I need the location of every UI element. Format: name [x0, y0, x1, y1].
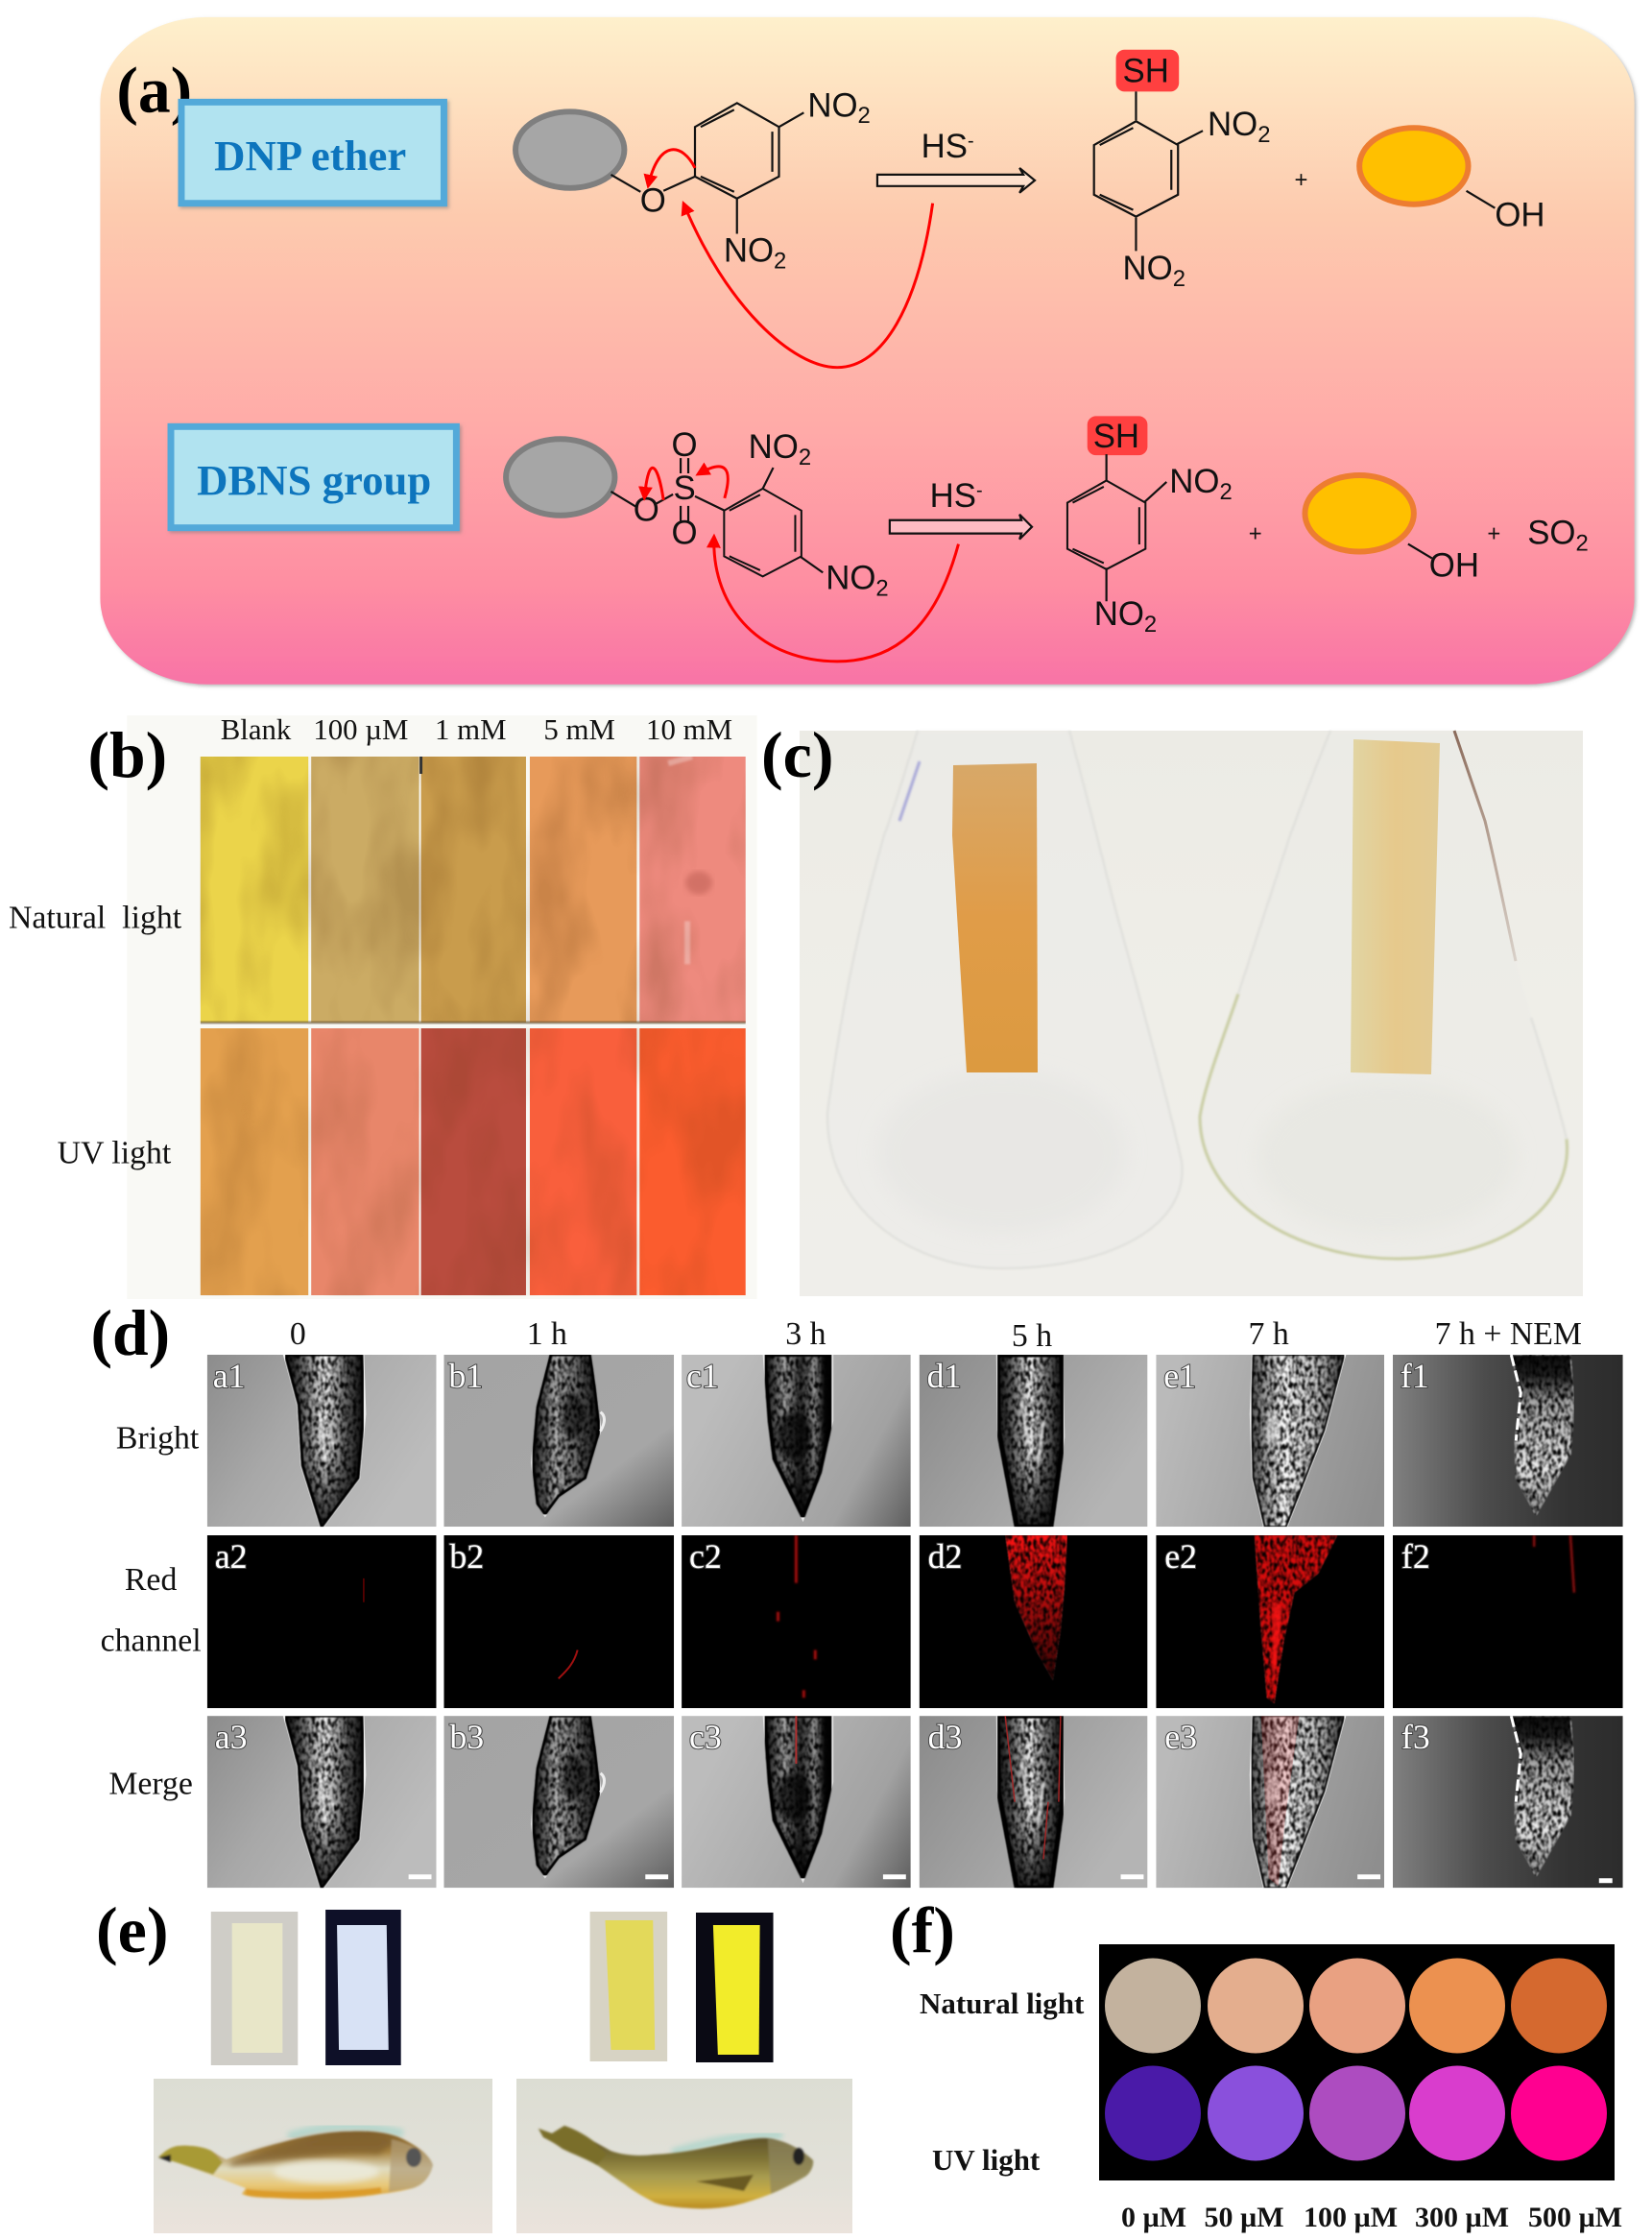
image e2: e2 [1164, 1537, 1197, 1576]
row label: UV light: UV light [932, 2143, 1041, 2177]
concentration labels: 300 µM [1415, 2202, 1509, 2233]
plus sign: + [1487, 521, 1500, 547]
column headers: 5 h [1012, 1318, 1052, 1354]
product: 2,4-dinitrothiophenol [1094, 50, 1271, 292]
product: 2,4-dinitrothiophenol: NO [1169, 464, 1219, 500]
product: fluorophore [1305, 475, 1479, 584]
panel a background [100, 17, 1635, 685]
molecule: DNP ether substrate: O [640, 183, 666, 220]
column headers: 3 h [785, 1316, 826, 1352]
flask photo background [800, 731, 1583, 1296]
heading (d): (d) [90, 1297, 170, 1369]
black panel with discs [1099, 1944, 1615, 2180]
reagent HS-: HS [922, 129, 968, 165]
image c2: c2 [689, 1537, 722, 1576]
row label: Natural light: Natural light [9, 900, 182, 935]
column headers: 1 h [527, 1316, 567, 1352]
image a2: a2 [215, 1537, 248, 1576]
concentration labels: 50 µM [1204, 2202, 1284, 2233]
panel d: confocal imaging of root tips [90, 1297, 1623, 1888]
discs: UV light [1105, 2066, 1607, 2160]
row labels [101, 1420, 202, 1802]
molecule: DBNS substrate: O [672, 427, 698, 464]
molecule: DNP ether substrate: NO [724, 232, 774, 269]
product: 2,4-dinitrothiophenol: NO [1094, 596, 1144, 633]
image b1: b1 [448, 1357, 483, 1395]
product: SO2: SO [1527, 516, 1575, 552]
image d1 [920, 1355, 1148, 1527]
product: 2,4-dinitrothiophenol: 2 [1144, 612, 1157, 638]
photo: spoiled fish [516, 2079, 852, 2233]
panel c: strips in conical flasks [761, 718, 1583, 1296]
product: 2,4-dinitrothiophenol [1067, 416, 1233, 638]
product: 2,4-dinitrothiophenol: 2 [1257, 122, 1271, 148]
concentration labels [1121, 2202, 1622, 2233]
heading (a): (a) [116, 54, 192, 126]
image f1: f1 [1401, 1357, 1429, 1395]
panel f: concentration discs [890, 1893, 1622, 2233]
image a3: a3 [215, 1718, 248, 1756]
image b1 [443, 1355, 674, 1527]
image c2 [682, 1535, 911, 1709]
molecule: DBNS substrate: NO [826, 560, 875, 596]
image d3 [920, 1716, 1148, 1888]
product: 2,4-dinitrothiophenol: 2 [1173, 266, 1185, 292]
image f1 [1393, 1355, 1623, 1527]
label box: DBNS group [171, 426, 456, 528]
image f3: f3 [1401, 1718, 1430, 1756]
strip: fresh, natural light [211, 1912, 298, 2065]
image f2 [1393, 1535, 1623, 1709]
right strip [1351, 739, 1440, 1074]
molecule: DBNS substrate: O [634, 493, 659, 529]
image f2: f2 [1401, 1537, 1430, 1576]
panel b: test strips under natural and UV light [9, 713, 757, 1299]
image a1 [207, 1355, 436, 1527]
arrow: red electron curves 2 [644, 467, 958, 662]
reagent HS-: - [976, 480, 983, 501]
row label: UV light: UV light [58, 1135, 172, 1171]
molecule: DBNS substrate: 2 [875, 575, 889, 601]
molecule: DNP ether substrate: 2 [858, 103, 871, 129]
product: 2,4-dinitrothiophenol: NO [1123, 251, 1173, 287]
product: fluorophore: OH [1429, 547, 1479, 584]
molecule: DBNS substrate: NO [749, 429, 799, 466]
row labels: Merge [108, 1767, 193, 1802]
product: 2,4-dinitrothiophenol: SH [1123, 53, 1169, 89]
strips: natural light [201, 757, 746, 1023]
image b2 [443, 1535, 674, 1709]
molecule: DBNS substrate: 2 [799, 445, 811, 470]
molecule: DNP ether substrate [515, 87, 871, 274]
image b3 [443, 1716, 674, 1888]
row: red channel images [207, 1535, 1623, 1708]
column labels: 100 µM [313, 713, 408, 746]
discs: natural light [1105, 1959, 1607, 2053]
column labels: Blank [221, 713, 292, 746]
row: bright field images [207, 1355, 1623, 1527]
strips: UV light [201, 1028, 746, 1295]
image c3: c3 [689, 1718, 722, 1756]
label box: DNP ether: DNP ether [214, 132, 406, 180]
right flask body and outline [1200, 731, 1568, 1259]
concentration labels: 0 µM [1121, 2202, 1186, 2233]
column headers: 7 h + NEM [1435, 1316, 1582, 1352]
image c1 [682, 1355, 911, 1527]
molecule: DNP ether substrate: 2 [774, 248, 786, 274]
strip: fresh, UV light [325, 1910, 401, 2065]
image c3 [682, 1716, 911, 1888]
image e1: e1 [1163, 1357, 1196, 1395]
reagent HS-: HS [930, 478, 976, 515]
image b3: b3 [449, 1718, 484, 1756]
heading (c): (c) [761, 718, 833, 791]
panel a: reaction mechanisms [100, 17, 1635, 685]
product: 2,4-dinitrothiophenol: NO [1208, 107, 1257, 143]
plus sign: + [1249, 521, 1262, 547]
image e1 [1156, 1355, 1384, 1527]
image d2 [920, 1535, 1148, 1709]
panel e: strips and fish samples [96, 1893, 852, 2233]
column labels [221, 713, 732, 746]
arrow: red electron curves 1 [648, 150, 933, 368]
panel b backdrop [127, 715, 757, 1299]
row: merged images [207, 1716, 1623, 1888]
row labels: channel [101, 1623, 202, 1658]
image e3: e3 [1164, 1718, 1197, 1756]
column headers: 7 h [1249, 1316, 1289, 1352]
heading (b): (b) [87, 719, 167, 791]
arrow: reaction 2 [890, 515, 1032, 540]
image e2 [1156, 1535, 1384, 1709]
concentration labels: 500 µM [1528, 2202, 1622, 2233]
column labels: 5 mM [543, 713, 615, 746]
label box: DBNS group: DBNS group [197, 456, 431, 504]
image d2: d2 [928, 1537, 962, 1576]
plus sign: + [1295, 167, 1307, 193]
image a3 [207, 1716, 436, 1888]
test strips [211, 1910, 774, 2065]
image b2: b2 [449, 1537, 484, 1576]
image a2 [207, 1535, 436, 1709]
label box: DNP ether [181, 102, 443, 204]
row label: Natural light: Natural light [920, 1987, 1085, 2020]
molecule: DBNS substrate: S [673, 470, 696, 507]
image e3 [1156, 1716, 1384, 1888]
molecule: DNP ether substrate: NO [807, 87, 858, 124]
product: SO2: 2 [1575, 531, 1589, 557]
image f3 [1393, 1716, 1623, 1888]
image d3: d3 [928, 1718, 962, 1756]
product: fluorophore [1359, 128, 1545, 234]
left strip [952, 763, 1038, 1072]
reagent HS-: - [968, 131, 974, 152]
image c1: c1 [686, 1357, 719, 1395]
column headers: 0 [290, 1316, 306, 1352]
photo: fresh fish [154, 2079, 492, 2233]
column headers [290, 1316, 1582, 1354]
image a1: a1 [213, 1357, 246, 1395]
image d1: d1 [927, 1357, 961, 1395]
heading (e): (e) [96, 1893, 168, 1966]
product: fluorophore: OH [1495, 198, 1545, 234]
column labels: 1 mM [435, 713, 507, 746]
left flask body and outline [827, 731, 1183, 1268]
row labels: Bright [116, 1420, 200, 1457]
arrow: reaction 1 [877, 168, 1035, 193]
column labels: 10 mM [646, 713, 732, 746]
molecule: DBNS substrate: O [672, 516, 698, 552]
product: 2,4-dinitrothiophenol: 2 [1219, 479, 1233, 505]
row labels: Red [125, 1562, 177, 1598]
strip: spoiled, natural light [590, 1912, 667, 2061]
concentration labels: 100 µM [1304, 2202, 1398, 2233]
molecule: DBNS substrate [506, 427, 889, 601]
product: 2,4-dinitrothiophenol: SH [1093, 419, 1139, 455]
strip: spoiled, UV light [696, 1913, 774, 2062]
heading (f): (f) [890, 1893, 955, 1966]
